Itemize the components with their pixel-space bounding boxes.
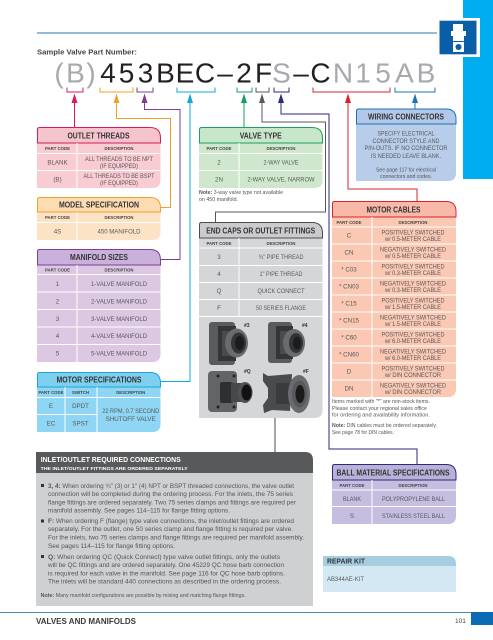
bullet: 3, 4: connection will be completed during the ordering process. For the inlets, the 75 series (48, 491, 293, 498)
panel: valve type (199, 128, 322, 188)
sample part number: 4 (100, 58, 116, 88)
arrow: wiring connectors (395, 88, 435, 109)
panel: motor specifications: DPDT (72, 403, 89, 410)
panel: motor cables: w/ 6.0-METER CABLE (384, 355, 441, 362)
panel: motor cables: PART CODE (336, 220, 362, 225)
panel: valve type: 2 (217, 160, 221, 166)
panel: end caps or outlet fittings: END CAPS OR OUTLET FITTINGS (206, 226, 316, 236)
panel: outlet threads: ALL THREADS TO BE BSPT (84, 173, 155, 180)
panel: motor cables: NEGATIVELY SWITCHED (380, 246, 446, 254)
panel: motor cables: w/ 0.5-METER CABLE (384, 253, 441, 260)
panel: manifold sizes: 5-VALVE MANIFOLD (91, 350, 147, 358)
panel: motor cables: * C60 (341, 334, 357, 342)
panel: motor cables (332, 202, 456, 397)
panel: wiring connectors: See page 117 for electrical (376, 168, 436, 174)
sample part number: 1 (355, 58, 371, 88)
panel: ball material specifications (332, 464, 456, 524)
panel: end caps or outlet fittings: PART CODE (206, 241, 232, 246)
valve type note: on 450 manifold. (199, 197, 238, 203)
panel: motor specifications: SHUTOFF VALVE (106, 416, 156, 423)
photo: fitting #3: #3 (244, 323, 250, 329)
panel: motor cables: w/ 0.3-METER CABLE (384, 270, 441, 277)
motor cables notes: Please contact your regional sales office (332, 406, 427, 412)
inlet panel header: THE INLET/OUTLET FITTINGS ARE ORDERED SEPARATELY (41, 466, 189, 471)
panel: valve type: VALVE TYPE (240, 132, 282, 140)
panel: motor cables: w/ 6.0-METER CABLE (384, 338, 441, 345)
valve type note (199, 190, 283, 203)
panel: ball material specifications: BLANK (343, 496, 362, 503)
bullet: F: For the inlets, two 75 series clamps and flange fittings are required per manifold assembly. (48, 534, 304, 542)
panel: motor cables: DESCRIPTION (398, 220, 428, 225)
panel: motor cables: w/ 1.5-METER CABLE (384, 321, 441, 328)
sample part number: 5 (119, 58, 134, 88)
bullet: F (41, 518, 304, 550)
panel: motor cables: w/ 0.5-METER CABLE (384, 236, 441, 243)
panel: manifold sizes: 3-VALVE MANIFOLD (91, 316, 147, 323)
arrow: model specification (100, 88, 170, 208)
panel: manifold sizes (37, 250, 160, 362)
panel: manifold sizes: 2-VALVE MANIFOLD (91, 298, 147, 306)
panel: motor cables: w/ DIN CONNECTOR (384, 372, 441, 379)
panel: motor cables: * CN15 (339, 318, 360, 324)
panel: motor cables: * CN03 (339, 284, 360, 290)
panel: model specification: 4S (54, 228, 61, 236)
inlet panel header: INLET/OUTLET REQUIRED CONNECTIONS (41, 455, 181, 464)
panel: manifold sizes: MANIFOLD SIZES (70, 253, 129, 262)
panel: repair kit: REPAIR KIT (327, 558, 366, 566)
icon: valve (437, 18, 480, 57)
panel: valve type: 2-WAY VALVE (264, 160, 298, 166)
panel: end caps or outlet fittings: F (217, 305, 221, 312)
panel: motor cables: POSITIVELY SWITCHED (382, 264, 445, 270)
panel: motor specifications: PART CODE (38, 390, 64, 395)
panel: wiring connectors: IS NEEDED LEAVE BLANK. (371, 153, 441, 160)
panel: motor cables: MOTOR CABLES (366, 206, 421, 214)
panel: ball material specifications: PART CODE (340, 483, 364, 488)
panel: motor cables: * CN60 (339, 352, 360, 358)
panel: end caps or outlet fittings: Q (217, 288, 222, 295)
sample part number: N (333, 58, 353, 88)
panel: manifold sizes: 5 (56, 350, 60, 358)
panel: ball material specifications: POLYPROPYLENE BALL (382, 496, 445, 503)
bullet: F: See pages 114–115 for flange fitting options. (48, 543, 175, 550)
panel: end caps or outlet fittings: 1" PIPE THREAD (260, 271, 303, 278)
panel: repair kit (323, 556, 456, 592)
panel: motor cables: w/ 0.3-METER CABLE (384, 287, 441, 294)
sample part number: S (272, 58, 291, 88)
panel: motor specifications: MOTOR SPECIFICATIONS (56, 376, 142, 384)
panel: ball material specifications: BALL MATERIAL SPECIFICATIONS (336, 468, 450, 478)
bullet: 3, 4: flange fittings are ordered separately. Two 75 series clamps and fittings are required per (48, 500, 296, 506)
panel: outlet threads: (B) (53, 176, 62, 184)
panel: manifold sizes: PART CODE (45, 268, 70, 272)
panel: motor cables: POSITIVELY SWITCHED (382, 366, 445, 372)
photo: fitting #3 (209, 322, 250, 365)
panel: motor specifications: SPST (72, 420, 89, 428)
panel: wiring connectors (356, 109, 456, 181)
bullet: 3, 4: manifold assembly. See pages 114–115 for flange fitting options. (48, 508, 230, 514)
arrow: motor cables (313, 88, 417, 201)
panel: motor cables: w/ DIN CONNECTOR (384, 389, 441, 396)
photo: fitting #Q (208, 369, 252, 412)
footer title: VALVES AND MANIFOLDS (36, 616, 136, 626)
panel: end caps or outlet fittings (199, 222, 322, 418)
panel: outlet threads: DESCRIPTION (104, 146, 134, 151)
panel: inlet/outlet required connections (36, 452, 313, 606)
panel: motor cables: NEGATIVELY SWITCHED (380, 314, 446, 322)
panel: model specification: 450 MANIFOLD (98, 228, 141, 236)
panel: motor cables: w/ 1.5-METER CABLE (384, 304, 441, 311)
bullet: Q: is required for each valve in the manifold. See page 116 for QC hose barb options. (48, 570, 285, 578)
arrow: end caps (216, 88, 326, 222)
arrow: outlet threads (67, 88, 83, 127)
panel: motor cables: POSITIVELY SWITCHED (382, 298, 445, 304)
page number: 101 (455, 618, 466, 625)
panel: motor cables: DN (345, 386, 353, 392)
photo: fitting #4 (268, 322, 308, 363)
sample part number: 5 (375, 58, 391, 88)
panel: manifold sizes: 1 (56, 281, 60, 288)
panel: manifold sizes: 1-VALVE MANIFOLD (91, 281, 147, 288)
panel: end caps or outlet fittings: 4 (217, 271, 221, 278)
panel: model specification: PART CODE (45, 215, 70, 220)
panel: end caps or outlet fittings: 50 SERIES FLANGE (256, 305, 306, 312)
panel: motor cables: CN (345, 250, 353, 256)
panel: motor specifications: E (49, 403, 53, 410)
inlet panel header (36, 452, 313, 473)
panel: valve type: DESCRIPTION (266, 146, 296, 151)
bullet: 3, 4 (41, 483, 296, 514)
panel: outlet threads (37, 128, 160, 188)
panel: outlet threads: PART CODE (45, 146, 70, 151)
panel: motor cables: NEGATIVELY SWITCHED (380, 348, 446, 356)
motor cables notes: Items marked with "*" are non-stock items. (332, 399, 430, 405)
panel: motor cables: POSITIVELY SWITCHED (382, 332, 445, 338)
panel: ball material specifications: DESCRIPTION (398, 483, 428, 488)
panel: valve type: PART CODE (206, 146, 232, 151)
motor cables notes: See page 78 for DIN cables. (332, 430, 394, 436)
photo: fitting #Q: #Q (244, 369, 251, 375)
sample part number: 2 (236, 58, 252, 88)
panel: outlet threads: (IF EQUIPPED) (100, 163, 138, 170)
panel: manifold sizes: 4 (56, 333, 60, 340)
panel: valve type: 2-WAY VALVE, NARROW (248, 176, 315, 184)
connector to inlet panel (274, 418, 276, 452)
panel: motor specifications: SWITCH (72, 390, 89, 395)
panel: wiring connectors: WIRING CONNECTORS (368, 112, 445, 122)
arrow: motor specifications (160, 88, 215, 382)
panel: motor cables: * C15 (341, 300, 357, 308)
panel: model specification: MODEL SPECIFICATION (59, 200, 139, 210)
panel: model specification (37, 198, 160, 240)
sample part number: B (417, 58, 435, 88)
panel: motor cables: * C03 (341, 266, 357, 274)
panel: outlet threads: (IF EQUIPPED) (100, 180, 138, 187)
bullet: F: F: When ordering F (flange) type valve connections, the inlet/outlet fittings are ordered (48, 518, 295, 525)
panel: motor specifications: EC (47, 420, 56, 428)
photo: fitting #4: #4 (302, 323, 308, 329)
valve type note: Note: 3-way valve type not available (199, 190, 283, 196)
sample part number: E (176, 58, 194, 88)
blue side band (463, 0, 493, 179)
sample part number (54, 58, 435, 88)
panel: ball material specifications: STAINLESS STEEL BALL (382, 513, 445, 520)
sample part number: – (293, 58, 309, 88)
panel: wiring connectors: PIN-OUTS. IF NO CONNECTOR (364, 145, 448, 152)
panel: wiring connectors: CONNECTOR STYLE AND (372, 138, 440, 145)
arrow: ball material (274, 88, 417, 464)
bullet: Q: will be QC fittings and are ordered separately. One 45229 QC hose barb connection (47, 562, 284, 569)
sample part number: A (395, 58, 414, 88)
arrow: valve type (237, 88, 252, 127)
panel: ball material specifications: S (350, 513, 354, 520)
panel: repair kit: AB344AE-KIT (327, 577, 364, 583)
motor cables notes (332, 399, 437, 436)
bullet: 3, 4: 3, 4: When ordering ¾" (3) or 1" (4) NPT or BSPT threaded connections, the valve outlet (48, 483, 294, 490)
panel: motor specifications: DESCRIPTION (116, 390, 145, 395)
panel: motor cables: C (347, 232, 352, 240)
panel: valve type: 2N (215, 176, 223, 184)
sample part number: B (66, 58, 85, 88)
sample part number: C (195, 58, 215, 88)
panel: wiring connectors: SPECIFY ELECTRICAL (378, 130, 435, 138)
sample part number: C (310, 58, 331, 88)
sample part number: ( (54, 58, 64, 88)
footer rule (0, 612, 472, 613)
panel: wiring connectors: connectors and codes. (380, 174, 432, 180)
bullet: Q: Q: When ordering QC (Quick Connect) type valve outlet fittings, only the outlets (48, 554, 280, 561)
panel: manifold sizes: 3 (56, 316, 60, 323)
sample part number: B (156, 58, 175, 88)
footer blue tab (471, 612, 493, 625)
panel: outlet threads: ALL THREADS TO BE NPT (85, 156, 153, 163)
panel: end caps or outlet fittings: 3 (217, 254, 221, 261)
motor cables notes: for ordering and availability information. (332, 413, 430, 419)
panel: motor cables: NEGATIVELY SWITCHED (380, 280, 446, 288)
sample part number: ) (86, 58, 96, 88)
panel: motor specifications (37, 372, 160, 432)
panel: end caps or outlet fittings: DESCRIPTION (266, 241, 296, 246)
panel: outlet threads: BLANK (47, 160, 69, 166)
motor cables notes: Note: DIN cables must be ordered separately. (332, 423, 437, 429)
panel: manifold sizes: 4-VALVE MANIFOLD (91, 333, 147, 340)
panel: end caps or outlet fittings: QUICK CONNECT (258, 288, 305, 295)
header rule (37, 32, 437, 34)
panel: motor cables: D (347, 368, 352, 376)
sample part number: – (217, 58, 233, 88)
sample part number: 3 (138, 58, 153, 88)
panel: outlet threads: OUTLET THREADS (68, 132, 130, 140)
photo: fitting #F (263, 369, 310, 413)
bullet: Q (41, 554, 285, 586)
bullet: F: separately. For the outlet, one 50 series clamp and flange fitting is required per valve. (48, 526, 293, 533)
arrow: manifold sizes (137, 88, 180, 260)
panel: motor specifications: 22 RPM, 0.7 SECOND (102, 408, 160, 415)
panel: manifold sizes: 2 (56, 298, 60, 306)
panel: model specification: DESCRIPTION (104, 215, 134, 220)
panel: manifold sizes: DESCRIPTION (104, 268, 134, 272)
bullet: Q: The inlets will be standard 440 connections as described in the ordering process. (48, 578, 281, 586)
panel: motor cables: POSITIVELY SWITCHED (382, 230, 445, 236)
panel: end caps or outlet fittings: ¾" PIPE THREAD (258, 254, 304, 261)
photo: fitting #F: #F (303, 369, 309, 375)
panel: motor cables: NEGATIVELY SWITCHED (380, 382, 446, 390)
sample part number: F (255, 58, 272, 88)
inlet panel note: Note: Many manifold configurations are possible by mixing and matching flange fittings. (41, 593, 246, 599)
sample part number label: Sample Valve Part Number: (37, 48, 137, 56)
